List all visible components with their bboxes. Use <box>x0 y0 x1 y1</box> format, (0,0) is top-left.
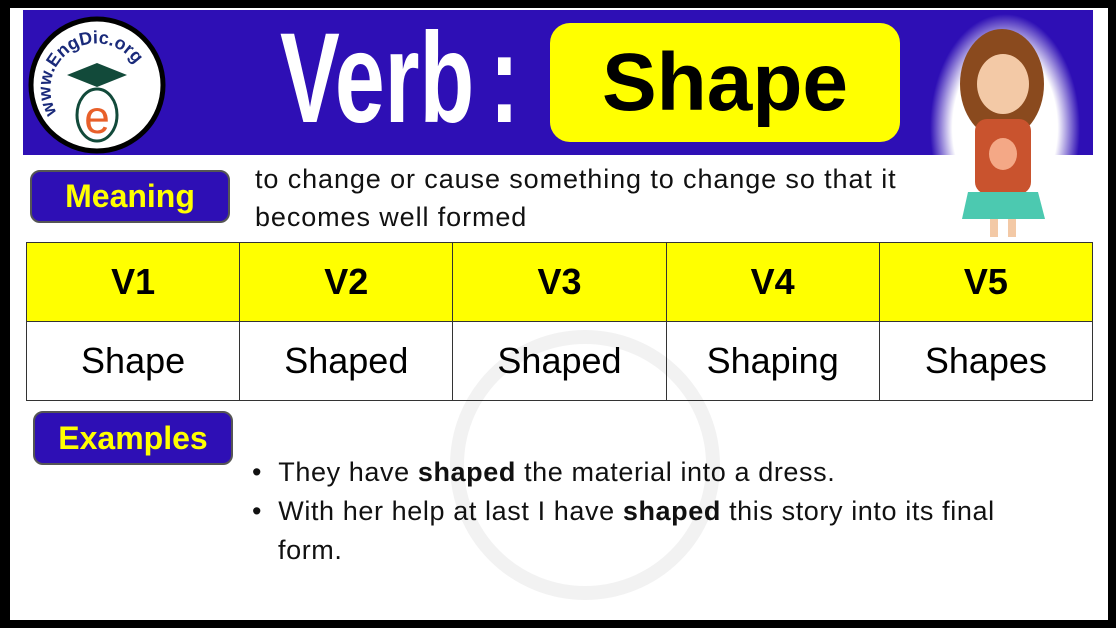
logo: www.EngDic.org <box>40 30 142 117</box>
verb forms table: Shaped <box>497 340 622 381</box>
title word box: Shape <box>602 37 848 128</box>
verb forms table: Shapes <box>925 340 1047 381</box>
examples list: • They have shaped the material into a dress. <box>252 457 835 487</box>
examples list: • With her help at last I have shaped this story into its final form. <box>252 496 995 565</box>
examples list <box>252 457 995 565</box>
examples button: Examples <box>58 420 208 456</box>
logo <box>28 16 166 154</box>
meaning button: Meaning <box>65 178 195 214</box>
examples button <box>33 411 233 465</box>
verb forms table: V5 <box>964 261 1008 302</box>
verb forms table: V1 <box>111 261 155 302</box>
verb forms table: Shaped <box>284 340 408 381</box>
meaning text: to change or cause something to change so that it becomes well formed <box>255 164 896 232</box>
title: Verb: Verb : <box>280 7 519 150</box>
meaning button <box>30 170 230 223</box>
verb forms table: Shaping <box>707 340 839 381</box>
banner <box>23 10 1093 155</box>
title word box <box>550 23 900 142</box>
logo: e <box>84 91 110 143</box>
verb forms table: Shape <box>81 340 185 381</box>
illustration: girl <box>931 15 1079 237</box>
verb forms table: V4 <box>751 261 795 302</box>
verb forms table <box>26 242 1093 401</box>
watermark <box>450 330 720 600</box>
verb forms table: V2 <box>324 261 368 302</box>
verb forms table: V3 <box>537 261 581 302</box>
